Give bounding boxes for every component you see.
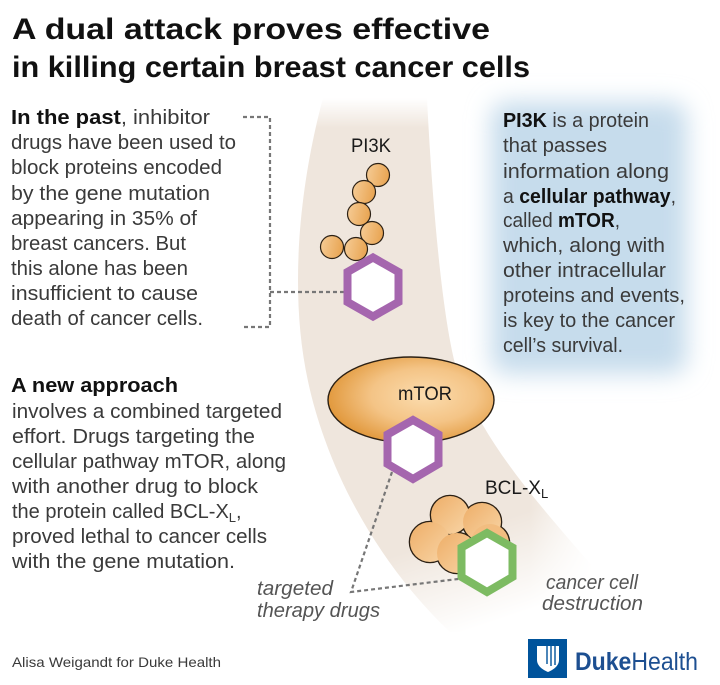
panel: PI3K explanation: PI3K is a protein [503,110,649,132]
text block: a new approach [11,375,286,573]
icon: mTOR protein [328,357,494,443]
label: mTOR: mTOR [398,384,452,405]
label: targeted therapy drugs [257,578,380,622]
text block: in the past: In the past , inhibitor [11,107,210,129]
panel: PI3K explanation: information along [503,161,669,183]
dotted bracket from text to PI3K drug [243,117,344,327]
text block: in the past: drugs have been used to [11,132,236,154]
logo: Duke Health: DukeHealth [575,648,698,676]
text block: a new approach: involves a combined targeted [12,401,282,423]
label: targeted therapy drugs: targeted [257,578,334,600]
text block: a new approach: A new approach [11,375,178,397]
text block: a new approach: proved lethal to cancer cells [12,526,267,548]
credit: Alisa Weigandt for Duke Health [12,654,221,670]
label: cancer cell destruction [542,572,643,615]
text block: a new approach: effort. Drugs targeting the [12,426,255,448]
cell pathway band [298,106,568,616]
panel: PI3K explanation: is key to the cancer [503,310,675,332]
text block: in the past: death of cancer cells. [11,308,203,330]
text block: a new approach: cellular pathway mTOR, along [12,451,286,473]
panel: PI3K explanation: other intracellular [503,260,666,282]
icon: purple drug hexagon on mTOR [388,420,438,479]
icon: green drug hexagon on BCL-XL [462,533,512,592]
label: targeted therapy drugs: therapy drugs [257,600,380,622]
text block: a new approach: L [229,510,236,525]
title: in killing certain breast cancer cells [12,51,530,84]
panel: PI3K explanation: cell’s survival. [503,335,623,357]
icon: BCL-XL protein cluster [410,496,509,573]
label: BCL-XL: L [541,486,548,501]
logo: Duke Health [528,639,698,678]
text block: a new approach: the protein called BCL-X [12,501,229,523]
icon: PI3K protein chain [320,164,390,260]
panel: PI3K explanation: which, along with [502,235,665,257]
dotted lines from drug label to hexagons [351,472,458,592]
text block: in the past: breast cancers. But [11,233,186,255]
panel: PI3K explanation: that passes [503,135,607,157]
label: cancer cell destruction: destruction [542,593,643,615]
icon: purple drug hexagon on PI3K [348,258,398,316]
text block: in the past: by the gene mutation [11,183,210,205]
title: A dual attack proves effective [12,13,490,46]
label: BCL-XL: BCL-X [485,478,541,499]
text block: in the past: this alone has been [11,258,188,280]
text block: a new approach: with another drug to block [11,476,259,498]
text block: in the past [11,107,236,330]
panel: PI3K explanation: a cellular pathway, [503,186,676,208]
text block: in the past: block proteins encoded [11,157,222,179]
text block: a new approach: , [236,501,242,523]
panel: PI3K explanation: called mTOR, [503,210,620,232]
panel: PI3K explanation: proteins and events, [503,285,685,307]
text block: in the past: appearing in 35% of [11,208,197,230]
text block: in the past: insufficient to cause [11,283,198,305]
label: cancer cell destruction: cancer cell [546,572,639,594]
panel: PI3K explanation [491,102,687,374]
text block: a new approach: with the gene mutation. [11,551,235,573]
title [12,13,530,84]
label: PI3K: PI3K [351,136,391,157]
